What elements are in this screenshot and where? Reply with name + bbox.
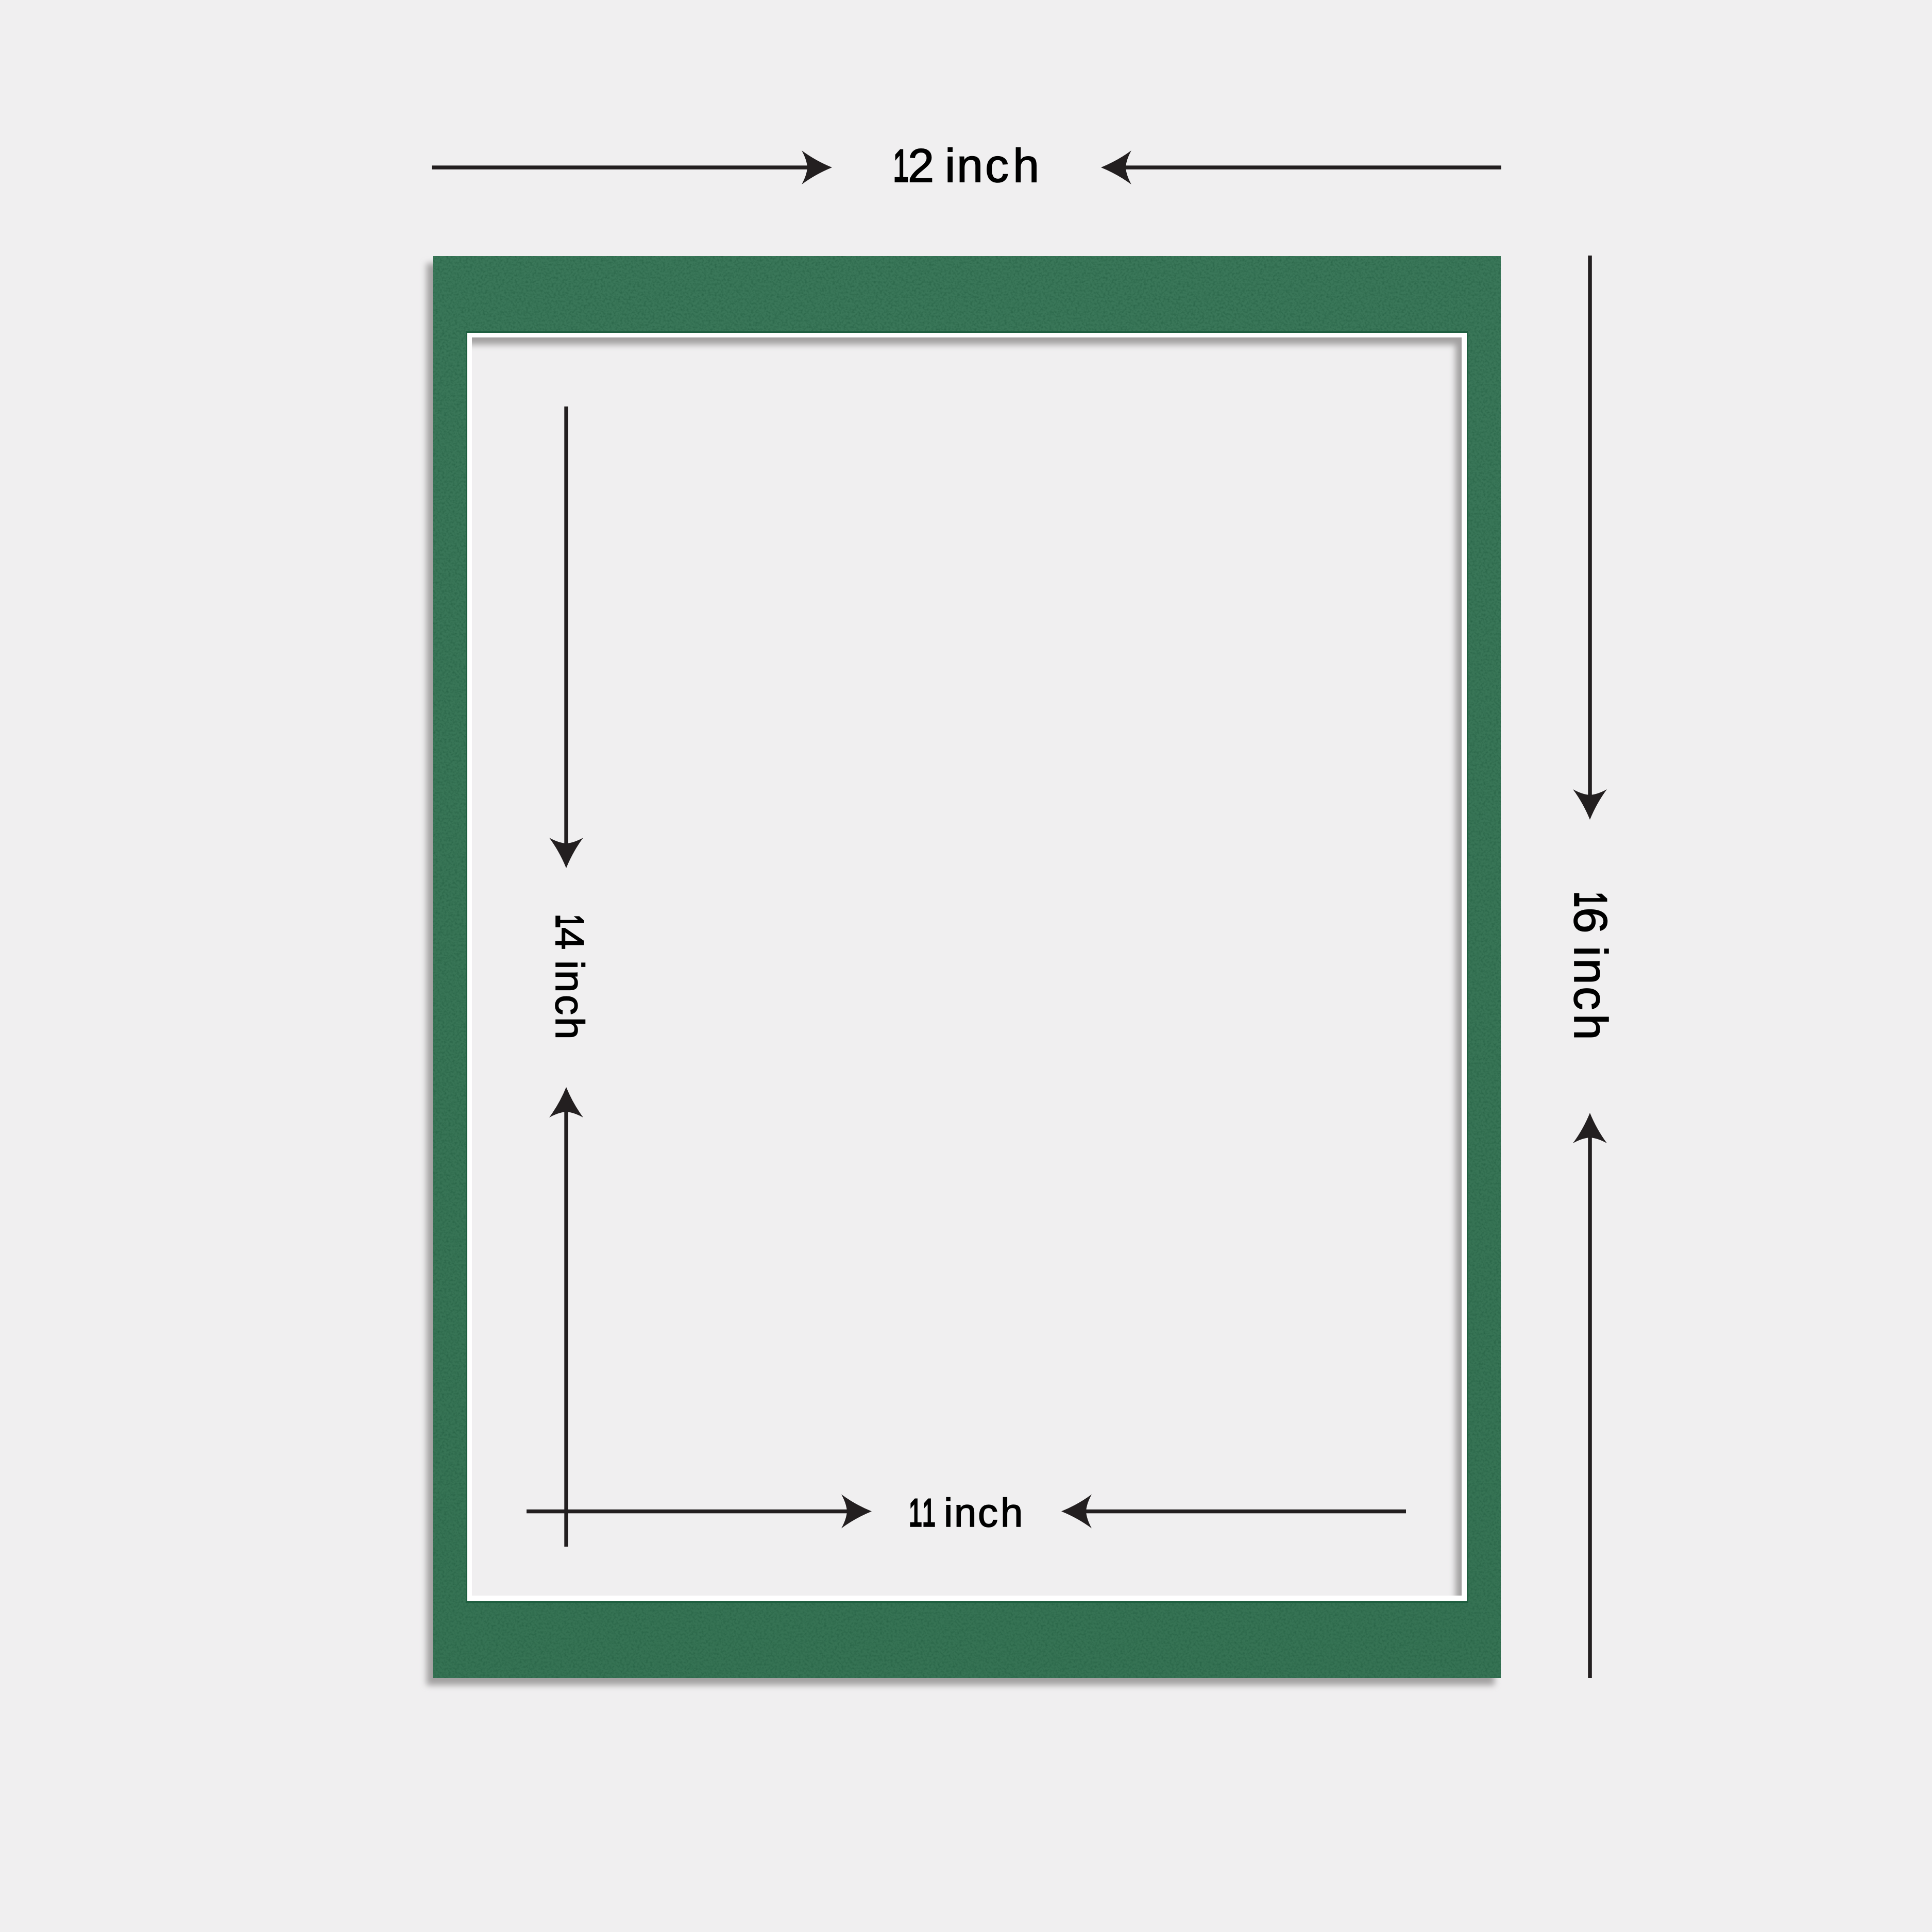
label: 11 inch width — [909, 1490, 1023, 1535]
label: 16 inch height: 6 inch — [1564, 907, 1616, 1040]
label: 11 inch width: inch — [944, 1490, 1023, 1535]
label: 14 inch height: 4 inch — [547, 927, 592, 1039]
panel: green mat board frame — [427, 256, 1501, 1685]
mat drop shadow — [427, 263, 1495, 1685]
arrow: top left pointing right — [432, 150, 832, 184]
arrow: inner left pointing up — [549, 1087, 583, 1547]
arrow: inner bottom pointing right — [527, 1494, 872, 1528]
label: 14 inch height: 1 — [548, 914, 590, 928]
label: 11 inch width: 1 — [922, 1492, 936, 1535]
arrow: top right pointing left — [1101, 150, 1501, 184]
arrow: inner left pointing down — [549, 406, 583, 868]
label: 11 inch width: 1 — [909, 1492, 922, 1535]
arrow: right side pointing up — [1573, 1113, 1607, 1678]
label: 12 inch width: 1 — [893, 141, 909, 191]
arrow: right side pointing down — [1573, 256, 1607, 820]
opening dark edge — [466, 331, 1468, 1603]
green mat surface — [433, 256, 1501, 1678]
label: 16 inch height: 1 — [1565, 891, 1616, 907]
arrow: inner bottom pointing left — [1061, 1494, 1406, 1528]
label: 12 inch width: 2 inch — [908, 140, 1039, 192]
white bevel — [467, 333, 1467, 1601]
